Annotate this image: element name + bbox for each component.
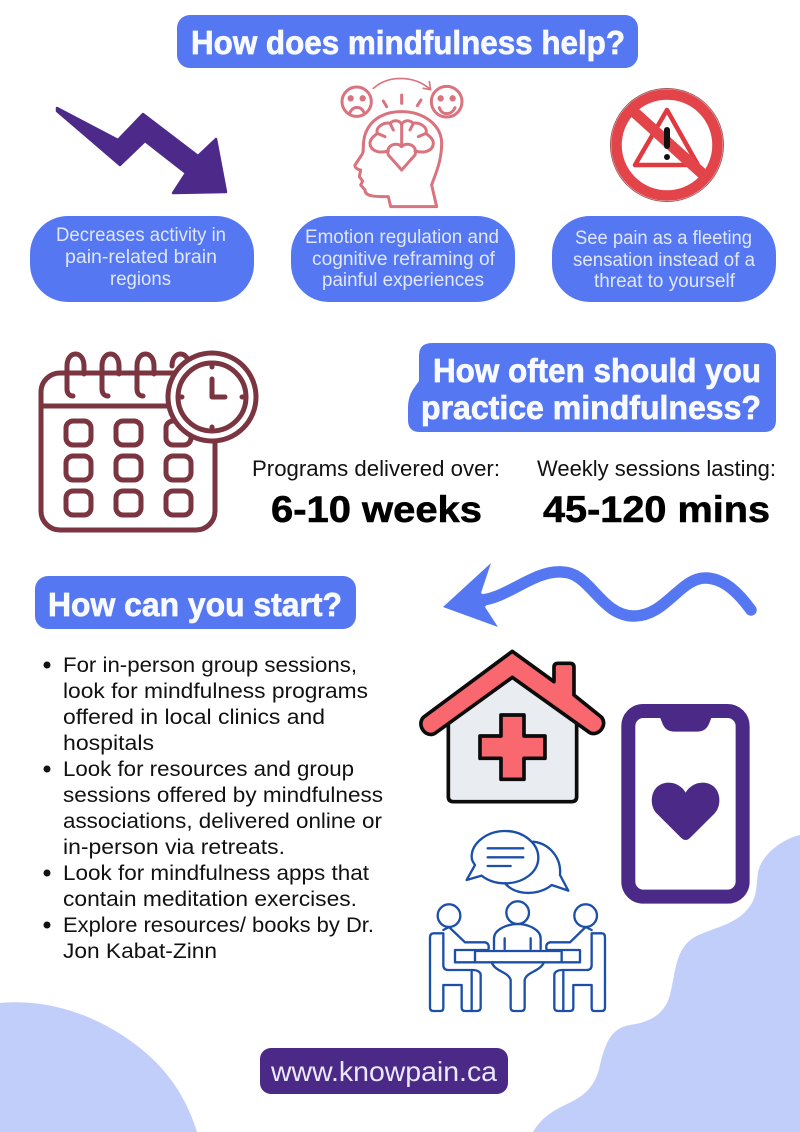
heading: How does mindfulness help? <box>177 15 638 68</box>
panel: fleeting sensation: sensation instead of a <box>573 250 755 271</box>
text block: how to start list: Look for resources and group <box>63 757 354 781</box>
text block: how to start list: Look for mindfulness apps that <box>63 861 369 885</box>
stat: weekly sessions lasting 45-120 mins: Weekly sessions lasting: <box>537 456 776 481</box>
panel: emotion regulation: cognitive reframing of <box>312 249 496 270</box>
text block: how to start list: offered in local clinics and <box>63 705 325 729</box>
panel: fleeting sensation: See pain as a fleeting <box>575 228 752 249</box>
text block: how to start list: contain meditation exercises. <box>63 887 357 911</box>
icon: phone with heart <box>628 711 743 897</box>
text block: how to start list: Jon Kabat-Zinn <box>63 939 217 963</box>
icon: group session around a table <box>430 831 605 1011</box>
heading: How does mindfulness help?: How does mindfulness help? <box>191 24 625 61</box>
icon: clinic house with cross <box>421 651 604 802</box>
icon: downward zigzag arrow <box>57 108 226 193</box>
stat: programs delivered over 6-10 weeks <box>252 456 500 530</box>
text block: how to start list: For in-person group sessions, <box>63 653 357 677</box>
heading: How can you start?: How can you start? <box>48 586 342 623</box>
stat: weekly sessions lasting 45-120 mins: 45-120 mins <box>543 489 770 530</box>
text block: how to start list: in-person via retreats. <box>63 835 285 859</box>
website badge <box>260 1048 508 1094</box>
stat: programs delivered over 6-10 weeks: Programs delivered over: <box>252 456 500 481</box>
panel: decreases activity: pain-related brain <box>65 247 217 268</box>
heading: How often should you practice mindfulness?: practice mindfulness? <box>421 389 761 426</box>
stat: weekly sessions lasting 45-120 mins <box>537 456 776 530</box>
icon: head with brain, heart and mood change <box>342 78 462 207</box>
panel: decreases activity: Decreases activity in <box>56 225 226 246</box>
panel: emotion regulation: Emotion regulation and <box>305 227 499 248</box>
icon: calendar with clock <box>41 353 256 530</box>
icon: no threat warning sign <box>610 88 724 202</box>
text block: how to start list: look for mindfulness programs <box>63 679 368 703</box>
panel: decreases activity <box>30 216 254 302</box>
heading: How often should you practice mindfulness?: How often should you <box>433 352 761 389</box>
panel: fleeting sensation: threat to yourself <box>594 271 736 292</box>
website badge: www.knowpain.ca <box>270 1056 497 1087</box>
background blob: bottom left <box>0 1002 197 1132</box>
panel: emotion regulation <box>291 216 515 302</box>
text block: how to start list: hospitals <box>63 731 154 755</box>
text block: how to start list <box>44 653 383 963</box>
text block: how to start list: associations, delivered online or <box>63 809 382 833</box>
panel: fleeting sensation <box>552 216 776 302</box>
panel: decreases activity: regions <box>110 269 171 290</box>
text block: how to start list: Explore resources/ books by Dr. <box>63 913 374 937</box>
background blob: bottom right <box>533 835 800 1132</box>
arrow: wavy blue arrow pointing left <box>443 563 751 627</box>
heading: How can you start? <box>35 576 356 629</box>
panel: emotion regulation: painful experiences <box>322 270 484 291</box>
text block: how to start list: sessions offered by mindfulness <box>63 783 383 807</box>
stat: programs delivered over 6-10 weeks: 6-10 weeks <box>271 489 482 530</box>
heading: How often should you practice mindfulness? <box>408 343 776 432</box>
